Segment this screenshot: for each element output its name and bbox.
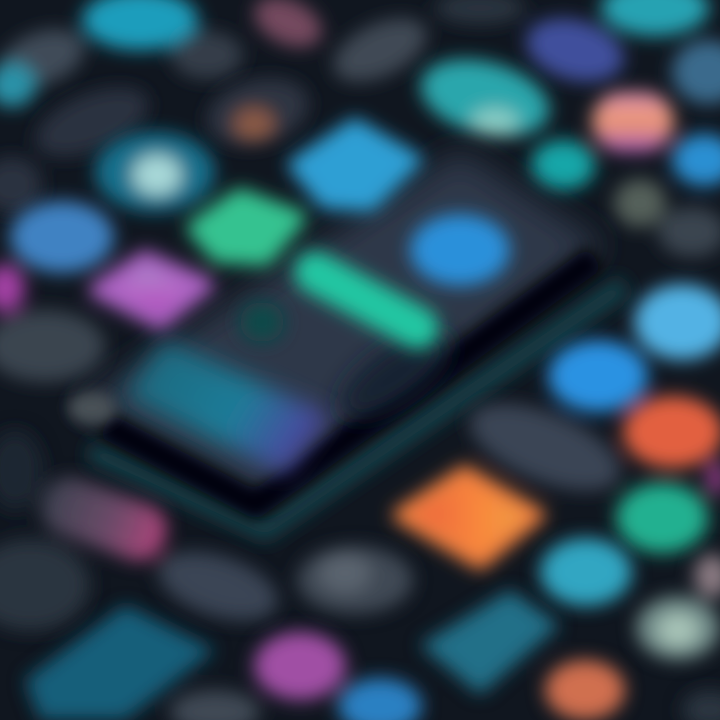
- on-screen dark texture: [327, 316, 463, 434]
- smartphone body: [68, 150, 625, 530]
- phone dark bezel: [105, 258, 595, 505]
- lower icons: [0, 430, 720, 660]
- on-screen small marker: [240, 302, 284, 342]
- phone teal rim: [90, 285, 625, 530]
- right side icons: [400, 284, 720, 563]
- coloured icons on and around phone: [0, 125, 510, 382]
- phone screen: [75, 150, 605, 500]
- upper middle icons: [0, 46, 720, 257]
- bottom row of icons: [25, 590, 720, 720]
- phone corner highlight: [68, 392, 116, 424]
- top row of icons: [0, 0, 720, 107]
- on-screen panel: [125, 340, 330, 475]
